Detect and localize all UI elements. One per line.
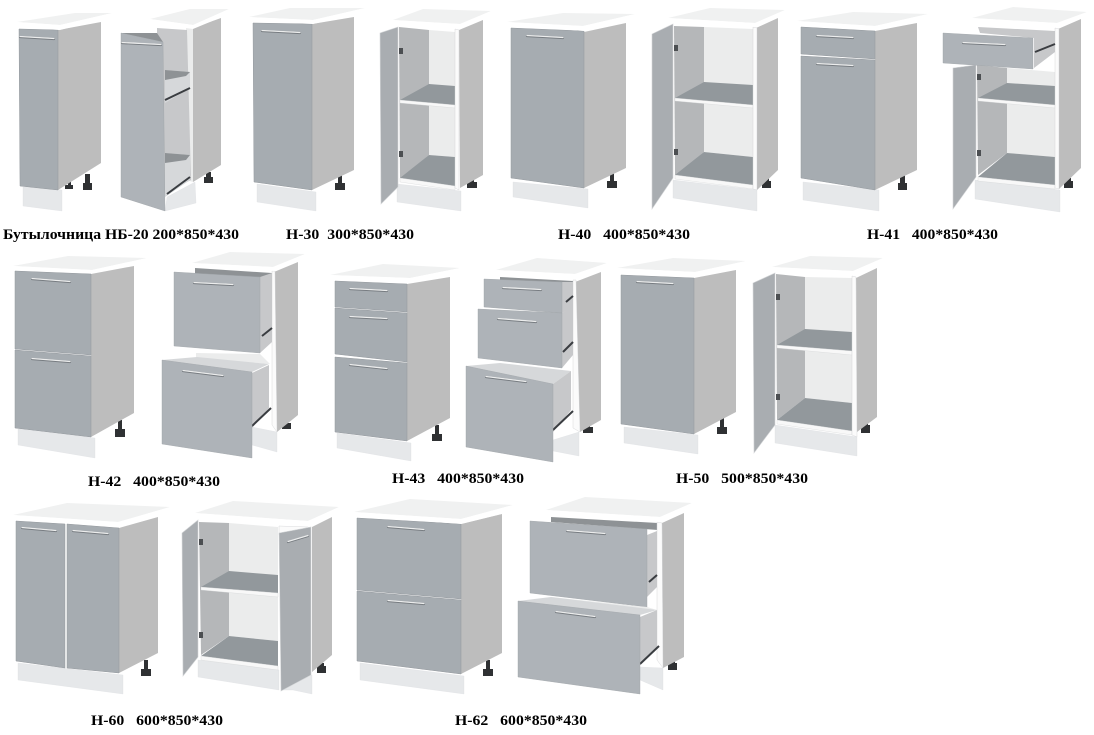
cabinet: Н-41 open with drawer <box>943 7 1087 212</box>
cabinet: Н-30 open <box>380 9 491 211</box>
cabinet: Н-40 open <box>652 8 785 211</box>
cabinet: Н-43 open with drawers <box>466 258 607 462</box>
cabinet: Н-41 closed <box>797 12 928 211</box>
cabinet: НБ-20 closed <box>17 13 112 211</box>
label: Н-42: Н-42 400*850*430 <box>88 474 220 490</box>
label: Н-41: Н-41 400*850*430 <box>867 227 998 243</box>
label: Н-30: Н-30 300*850*430 <box>286 227 414 243</box>
cabinet: Н-42 closed <box>13 256 147 458</box>
cabinet: Н-62 open with drawers <box>518 497 692 694</box>
cabinet: Н-42 open with drawers <box>162 252 305 458</box>
cabinet: Н-60 closed <box>13 503 170 694</box>
label: Н-50: Н-50 500*850*430 <box>676 471 808 487</box>
cabinet: Н-50 open <box>753 256 883 456</box>
cabinet: Н-50 closed <box>617 258 746 454</box>
cabinet: НБ-20 open with pull-out <box>121 9 229 211</box>
cabinet: Н-60 open <box>182 501 339 694</box>
label: Н-60: Н-60 600*850*430 <box>91 713 223 729</box>
label: Н-43: Н-43 400*850*430 <box>392 471 524 487</box>
label: Н-40: Н-40 400*850*430 <box>558 227 690 243</box>
cabinet: Н-30 closed <box>249 8 365 211</box>
label: НБ-20: Бутылочница НБ-20 200*850*430 <box>3 227 239 243</box>
cabinet: Н-43 closed <box>330 264 460 461</box>
cabinet: Н-62 closed <box>354 499 513 694</box>
label: Н-62: Н-62 600*850*430 <box>455 713 587 729</box>
cabinet: Н-40 closed <box>507 13 635 208</box>
